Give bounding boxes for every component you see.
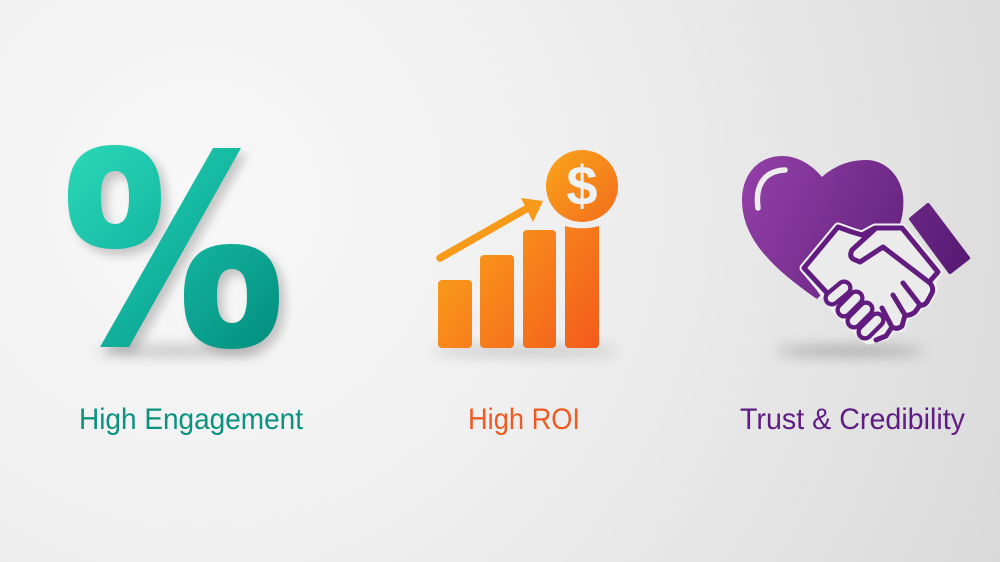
shadow: chart ground — [430, 348, 620, 354]
label: high roi: High ROI — [468, 403, 580, 436]
icon: handshake — [804, 227, 938, 340]
icon: dollar coin: $ — [566, 154, 598, 217]
label: high engagement: High Engagement — [79, 403, 303, 436]
icon: percent sign — [68, 145, 279, 349]
icon: heart — [742, 156, 903, 299]
panel: trust and credibility — [740, 156, 968, 436]
icon: dollar coin — [546, 150, 618, 222]
fist fingers — [832, 288, 877, 332]
panel: high engagement — [68, 145, 303, 436]
icon: cuff — [911, 205, 968, 272]
icon: heart highlight — [757, 170, 785, 208]
shadow: heart ground — [775, 348, 925, 354]
bar chart — [438, 226, 599, 348]
panel: high roi — [430, 150, 620, 436]
label: trust and credibility: Trust & Credibility — [740, 403, 965, 436]
arrow: growth — [440, 198, 543, 258]
shadow: percent — [74, 151, 285, 355]
shadow: percent ground — [95, 348, 265, 354]
